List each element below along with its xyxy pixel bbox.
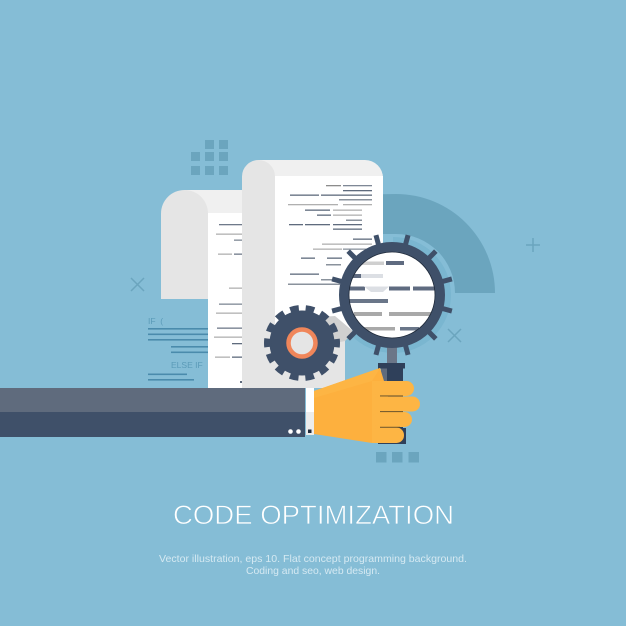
subtitle line 2: Coding and seo, web design. (246, 565, 380, 577)
icon: square grid decoration (191, 140, 228, 175)
cuff button (308, 430, 312, 433)
lens rim (344, 247, 440, 343)
cuff lower (306, 412, 314, 435)
magnifying glass (332, 235, 452, 365)
label: ELSE IF: ELSE IF (171, 360, 203, 370)
bottom square decoration (376, 452, 419, 462)
front scroll roll (242, 160, 275, 388)
back scroll code lines (214, 224, 242, 383)
code snippet: IF / ELSE IF (148, 316, 210, 381)
back scroll top strip (185, 190, 245, 213)
front scroll page (275, 176, 383, 388)
back scroll roll (161, 190, 208, 299)
magnifier handle shaft (387, 345, 397, 365)
small gear (268, 308, 336, 378)
sleeve (0, 388, 305, 437)
lens glass (349, 252, 435, 338)
gear hub (288, 330, 316, 356)
grip highlight (381, 368, 387, 382)
grip body (381, 368, 403, 444)
lens glow ring (350, 237, 451, 353)
gear teeth (268, 308, 336, 378)
label: IF: IF ( (148, 316, 163, 326)
gear body (270, 310, 334, 376)
icon: cross left (131, 278, 144, 291)
hand (314, 368, 420, 443)
sleeve upper (0, 388, 305, 412)
palm highlight (314, 368, 380, 398)
front scroll top strip (258, 160, 383, 180)
quarter ring chart shape (375, 194, 495, 293)
cuff upper (306, 388, 314, 412)
finger creases (380, 396, 403, 428)
front paper scroll (242, 160, 383, 388)
grip butt (378, 428, 406, 444)
handle grip (378, 363, 406, 444)
infographic canvas (0, 140, 540, 576)
lens inner edge (349, 252, 435, 338)
grip collar (378, 363, 405, 368)
lens shadow on page (320, 316, 354, 345)
subtitle line 1: Vector illustration, eps 10. Flat concept programming background. (159, 553, 467, 565)
fingers (372, 381, 420, 443)
front scroll code lines (288, 185, 372, 285)
back scroll page (208, 213, 244, 388)
back paper scroll (161, 190, 245, 388)
icon: plus (526, 238, 540, 252)
title: CODE OPTIMIZATION (173, 500, 454, 530)
fingers base (372, 381, 388, 443)
sleeve buttons (288, 429, 301, 434)
palm (314, 368, 384, 443)
icon: cross right (448, 329, 461, 342)
gear long shadow on page (275, 320, 345, 388)
code lines (148, 328, 210, 381)
shirt cuff (306, 388, 314, 435)
sleeve lower (0, 412, 305, 437)
magnifier teeth (332, 235, 452, 355)
magnified code lines (349, 261, 436, 330)
